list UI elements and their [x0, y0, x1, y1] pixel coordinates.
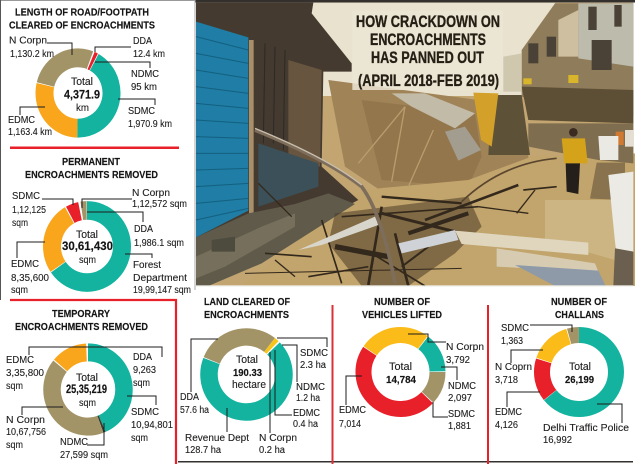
- labels: 4,126: [495, 420, 518, 431]
- labels: [6, 352, 173, 461]
- centre total: sqm: [79, 255, 96, 266]
- centre total: 25,35,219: [66, 384, 107, 396]
- labels: N Corpn: [132, 188, 170, 199]
- labels: 1.2 ha: [296, 393, 320, 404]
- labels: 27,599 sqm: [60, 450, 108, 461]
- centre total: Total: [76, 372, 98, 384]
- labels: 2,097: [448, 393, 472, 404]
- labels: N Coprn: [495, 362, 532, 373]
- panel: temporary encroachments removed: [6, 309, 173, 461]
- centre total: Total: [236, 354, 258, 366]
- panel: number of vehicles lifted: [339, 297, 484, 432]
- labels: Revenue Dept: [185, 433, 249, 444]
- labels: EDMC: [6, 355, 34, 366]
- labels: 10,67,756: [6, 427, 46, 438]
- labels: 2.3 ha: [300, 360, 326, 371]
- heading: LAND CLEARED OF: [204, 297, 290, 308]
- panel: length of road/footpath: [8, 8, 172, 141]
- centre total: Total: [389, 361, 412, 373]
- leader lines: [346, 334, 457, 417]
- labels: EDMC: [495, 407, 522, 418]
- divider: red rule left of vehicles panel: [332, 305, 334, 464]
- heading: ENCROACHMENTS REMOVED: [25, 170, 158, 181]
- centre total: 190.33: [233, 368, 262, 379]
- labels: 1,163.4 km: [8, 127, 52, 138]
- labels: 7,014: [339, 419, 361, 430]
- heading: [25, 157, 158, 181]
- labels: 9,263: [133, 365, 156, 376]
- panel: land cleared of encroachments: [180, 297, 328, 456]
- labels: EDMC: [339, 405, 366, 416]
- centre total: 4,371.9: [64, 90, 100, 102]
- labels: Department: [133, 273, 187, 284]
- labels: DDA: [133, 36, 152, 47]
- leader lines: [191, 338, 327, 433]
- labels: sqm: [12, 218, 28, 229]
- leader lines: [507, 325, 622, 423]
- heading: [9, 8, 155, 32]
- leader lines: [17, 199, 152, 258]
- labels: N Corpn: [446, 342, 484, 353]
- donut chart: [193, 321, 300, 428]
- labels: DDA: [180, 392, 199, 403]
- centre total: km: [76, 103, 89, 114]
- leader lines: [22, 347, 162, 445]
- labels: sqm: [11, 285, 28, 296]
- labels: sqm: [6, 381, 23, 392]
- labels: 10,94,801: [131, 420, 173, 431]
- labels: sqm: [6, 440, 23, 451]
- labels: SDMC: [501, 323, 529, 334]
- labels: 0.2 ha: [259, 445, 285, 456]
- labels: 16,992: [543, 435, 572, 446]
- labels: DDA: [134, 224, 153, 235]
- panel: number of challans: [495, 297, 631, 446]
- donut chart: [37, 337, 139, 442]
- labels: 57.6 ha: [180, 405, 209, 416]
- divider: red rule under first panel: [10, 146, 179, 149]
- labels: 19,99,147 sqm: [133, 285, 191, 296]
- centre total: hectare: [232, 379, 266, 391]
- donut chart: [38, 196, 136, 297]
- labels: EDMC: [8, 115, 35, 126]
- labels: 1,130.2 km: [10, 49, 54, 60]
- labels: 1,12,572 sqm: [132, 199, 187, 210]
- labels: DDA: [133, 352, 152, 363]
- labels: 3,35,800: [6, 368, 44, 379]
- heading: [551, 297, 607, 321]
- labels: 1,363: [501, 336, 523, 347]
- centre total: [66, 372, 107, 409]
- heading: PERMANENT: [62, 157, 120, 168]
- centre total: sqm: [79, 398, 96, 409]
- labels: EDMC: [11, 259, 39, 270]
- centre total: Total: [569, 361, 591, 373]
- headline over photo: [356, 13, 500, 90]
- labels: 12.4 km: [133, 49, 165, 60]
- labels: [180, 348, 328, 456]
- centre total: 14,784: [386, 374, 416, 386]
- centre total: [232, 354, 266, 391]
- panel: demolition photo with headline: [196, 3, 635, 287]
- labels: NDMC: [131, 69, 159, 80]
- labels: [11, 188, 191, 296]
- labels: 8,35,600: [11, 273, 49, 284]
- labels: 0.4 ha: [293, 419, 318, 430]
- labels: 1,986.1 sqm: [134, 238, 184, 249]
- heading: NUMBER OF: [374, 297, 430, 308]
- heading: VEHICLES LIFTED: [362, 310, 442, 321]
- heading: TEMPORARY: [52, 309, 110, 320]
- centre total: Total: [71, 76, 93, 88]
- labels: [495, 323, 629, 446]
- labels: 3,792: [446, 355, 470, 366]
- labels: 3,718: [495, 375, 518, 386]
- headline over photo: HAS PANNED OUT: [371, 49, 484, 67]
- heading: [362, 297, 442, 321]
- labels: 1,970.9 km: [128, 119, 172, 130]
- labels: [339, 342, 484, 432]
- headline over photo: (APRIL 2018-FEB 2019): [358, 72, 499, 90]
- labels: NDMC: [448, 381, 476, 392]
- centre total: Total: [76, 229, 98, 241]
- heading: [204, 297, 290, 321]
- divider: red rule left of challans panel: [487, 305, 489, 464]
- labels: SDMC: [131, 407, 159, 418]
- labels: N Corpn: [9, 36, 47, 46]
- labels: [8, 36, 172, 138]
- heading: CLEARED OF ENCROACHMENTS: [9, 20, 155, 32]
- donut chart: [348, 320, 453, 424]
- headline over photo: HOW CRACKDOWN ON: [356, 13, 500, 31]
- labels: SDMC: [128, 106, 155, 117]
- labels: SDMC: [12, 191, 40, 202]
- heading: NUMBER OF: [551, 297, 607, 308]
- labels: 1,12,125: [12, 205, 46, 216]
- labels: Forest: [133, 260, 161, 271]
- labels: Delhi Traffic Police: [543, 423, 629, 434]
- labels: EDMC: [293, 408, 320, 419]
- leader lines: [20, 43, 155, 115]
- donut chart: [32, 45, 124, 141]
- labels: N Corpn: [6, 415, 45, 426]
- centre total: [386, 361, 416, 386]
- heading: ENCROACHMENTS REMOVED: [15, 322, 148, 333]
- heading: CHALLANS: [555, 310, 604, 321]
- labels: NDMC: [60, 437, 88, 448]
- centre total: [565, 361, 594, 386]
- labels: SDMC: [448, 409, 475, 420]
- photo of demolition site: [196, 3, 635, 287]
- headline over photo: ENCROACHMENTS: [370, 31, 486, 49]
- centre total: [62, 229, 113, 266]
- donut chart: [527, 320, 631, 424]
- labels: sqm: [131, 433, 148, 444]
- labels: 128.7 ha: [185, 445, 221, 456]
- panel: permanent encroachments removed: [11, 157, 191, 297]
- heading: ENCROACHMENTS: [204, 310, 289, 321]
- labels: sqm: [133, 378, 150, 389]
- labels: N Corpn: [259, 433, 297, 444]
- heading: [15, 309, 148, 333]
- heading: LENGTH OF ROAD/FOOTPATH: [15, 8, 149, 18]
- labels: 95 km: [131, 82, 157, 93]
- labels: 1,881: [448, 421, 471, 432]
- labels: SDMC: [300, 348, 328, 359]
- centre total: 26,199: [565, 374, 594, 386]
- labels: NDMC: [296, 382, 325, 393]
- divider: red frame around third panel: [10, 300, 176, 464]
- centre total: [64, 76, 100, 114]
- centre total: 30,61,430: [62, 241, 113, 253]
